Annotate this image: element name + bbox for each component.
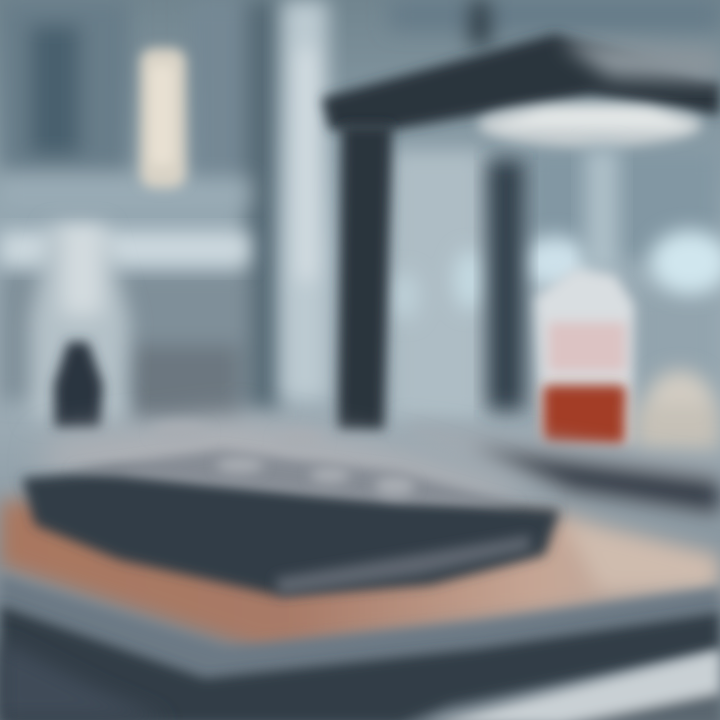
horizontal light band (0, 232, 250, 266)
second dark column (488, 160, 524, 410)
window glows (391, 230, 720, 320)
flask: left (30, 225, 130, 420)
background: left wall structure (0, 0, 280, 420)
bottle: white with red liquid (535, 268, 634, 445)
bottom right white stripe (425, 650, 720, 720)
device top: lighter keys (40, 418, 540, 510)
specimen jars: right (635, 370, 720, 450)
lower left sheen (0, 640, 170, 720)
red liquid (543, 385, 626, 445)
device highlights (70, 450, 530, 595)
bright vertical column (282, 0, 328, 400)
lamp disc (478, 103, 702, 147)
tray rim (0, 575, 720, 678)
warm lamp (140, 48, 186, 188)
right dark shelf (400, 420, 720, 520)
tray front dark (0, 605, 720, 720)
pale glass column (585, 148, 619, 273)
dark overhead beam (322, 34, 720, 130)
dark device (22, 470, 560, 596)
bottle body (535, 268, 634, 445)
tray surface: wood (0, 500, 720, 650)
device key spots (152, 423, 415, 496)
dark column (338, 125, 392, 430)
beam highlight (560, 42, 720, 82)
dark bottle: left (54, 342, 103, 428)
background: right window area (390, 0, 720, 420)
